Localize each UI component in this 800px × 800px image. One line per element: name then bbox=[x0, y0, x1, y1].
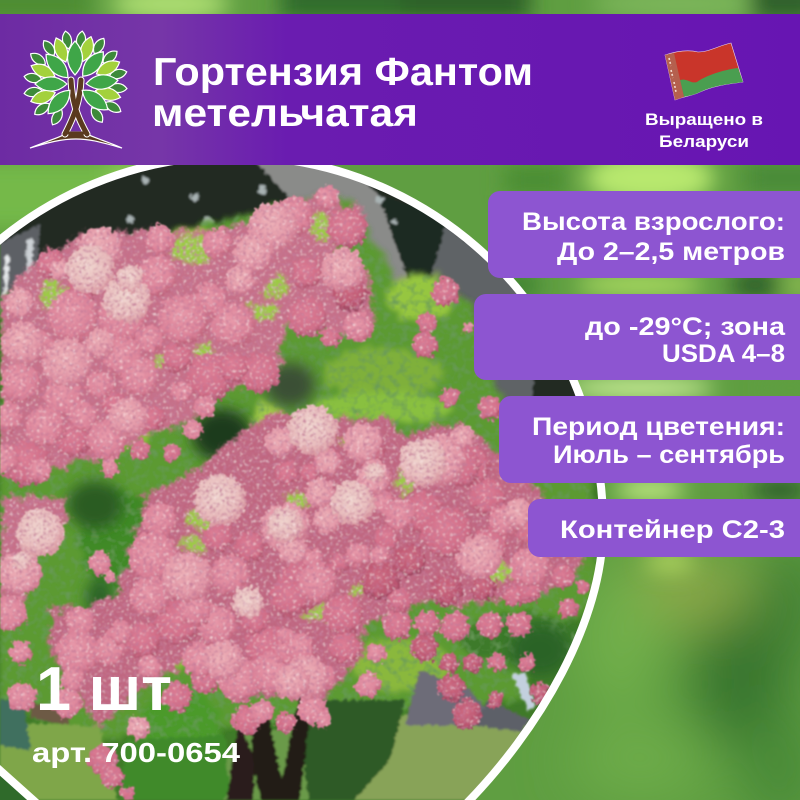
header banner bbox=[0, 14, 800, 165]
panel: flowering period bbox=[499, 396, 800, 483]
panel: adult height bbox=[488, 191, 800, 278]
article number: арт. 700-0654 bbox=[32, 737, 240, 768]
panel: flowering period: Июль – сентябрь bbox=[553, 441, 785, 469]
panel: container bbox=[528, 499, 800, 557]
panel: container: Контейнер С2-3 bbox=[560, 516, 785, 544]
icon: Belarus flag bbox=[665, 43, 743, 100]
dark gaps among foliage bbox=[67, 363, 570, 676]
photo: blooming panicled hydrangea in circle bbox=[0, 150, 614, 800]
dark trees and trunk behind bbox=[0, 165, 576, 446]
grown in Belarus label bbox=[645, 111, 763, 151]
title bbox=[152, 51, 533, 135]
panel: adult height: До 2–2,5 метров bbox=[557, 238, 785, 266]
quantity label: 1 шт bbox=[36, 655, 172, 724]
yellow-green leaves between flowers bbox=[18, 210, 520, 620]
grown in Belarus label: Выращено в bbox=[645, 111, 763, 129]
title: метельчатая bbox=[152, 92, 418, 135]
tree trunk and roots bbox=[30, 80, 122, 148]
logo: tree bbox=[23, 30, 128, 148]
panel: frost hardiness bbox=[474, 294, 800, 380]
white circular ring bbox=[0, 156, 603, 800]
grown in Belarus label: Беларуси bbox=[659, 133, 749, 151]
lawn, trunks and garden bbox=[0, 670, 535, 800]
pink crown masses bbox=[0, 191, 589, 726]
panel: flowering period: Период цветения: bbox=[532, 413, 785, 441]
pink flower clusters bbox=[0, 185, 590, 800]
title: Гортензия Фантом bbox=[153, 51, 533, 94]
foliage mass bbox=[0, 197, 600, 785]
panel: frost hardiness: до -29°С; зона bbox=[585, 313, 786, 341]
panel: adult height: Высота взрослого: bbox=[522, 208, 785, 236]
panel: frost hardiness: USDA 4–8 bbox=[662, 340, 785, 368]
